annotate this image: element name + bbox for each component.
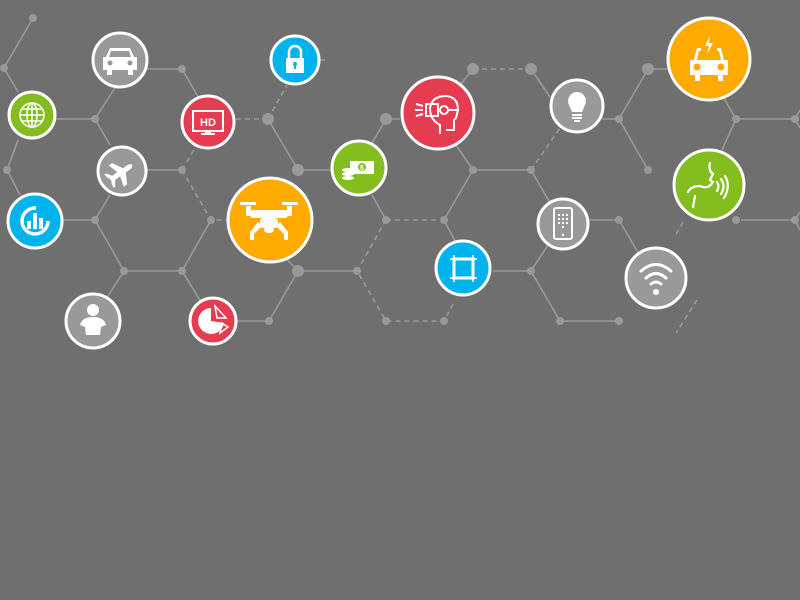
icon: VR head (402, 77, 474, 149)
icon: voice speech (674, 150, 744, 220)
icon: chart (8, 194, 62, 248)
icon: globe (9, 92, 55, 138)
icon: drone (228, 178, 312, 262)
icon: person (66, 294, 120, 348)
icon: wifi (626, 248, 686, 308)
icon: lightbulb (551, 80, 603, 132)
icon: HD tv: HD (200, 117, 216, 129)
icon: HD tv (182, 96, 234, 148)
icon: car (93, 33, 147, 87)
icon: electric car (668, 18, 750, 100)
icon: money (332, 141, 386, 195)
icon: pie (190, 298, 236, 344)
icon: lock (271, 36, 319, 84)
icon: airplane (98, 147, 146, 195)
icon: money: $ (360, 165, 364, 172)
icon: square crop (436, 241, 490, 295)
icon: phone (538, 199, 588, 249)
